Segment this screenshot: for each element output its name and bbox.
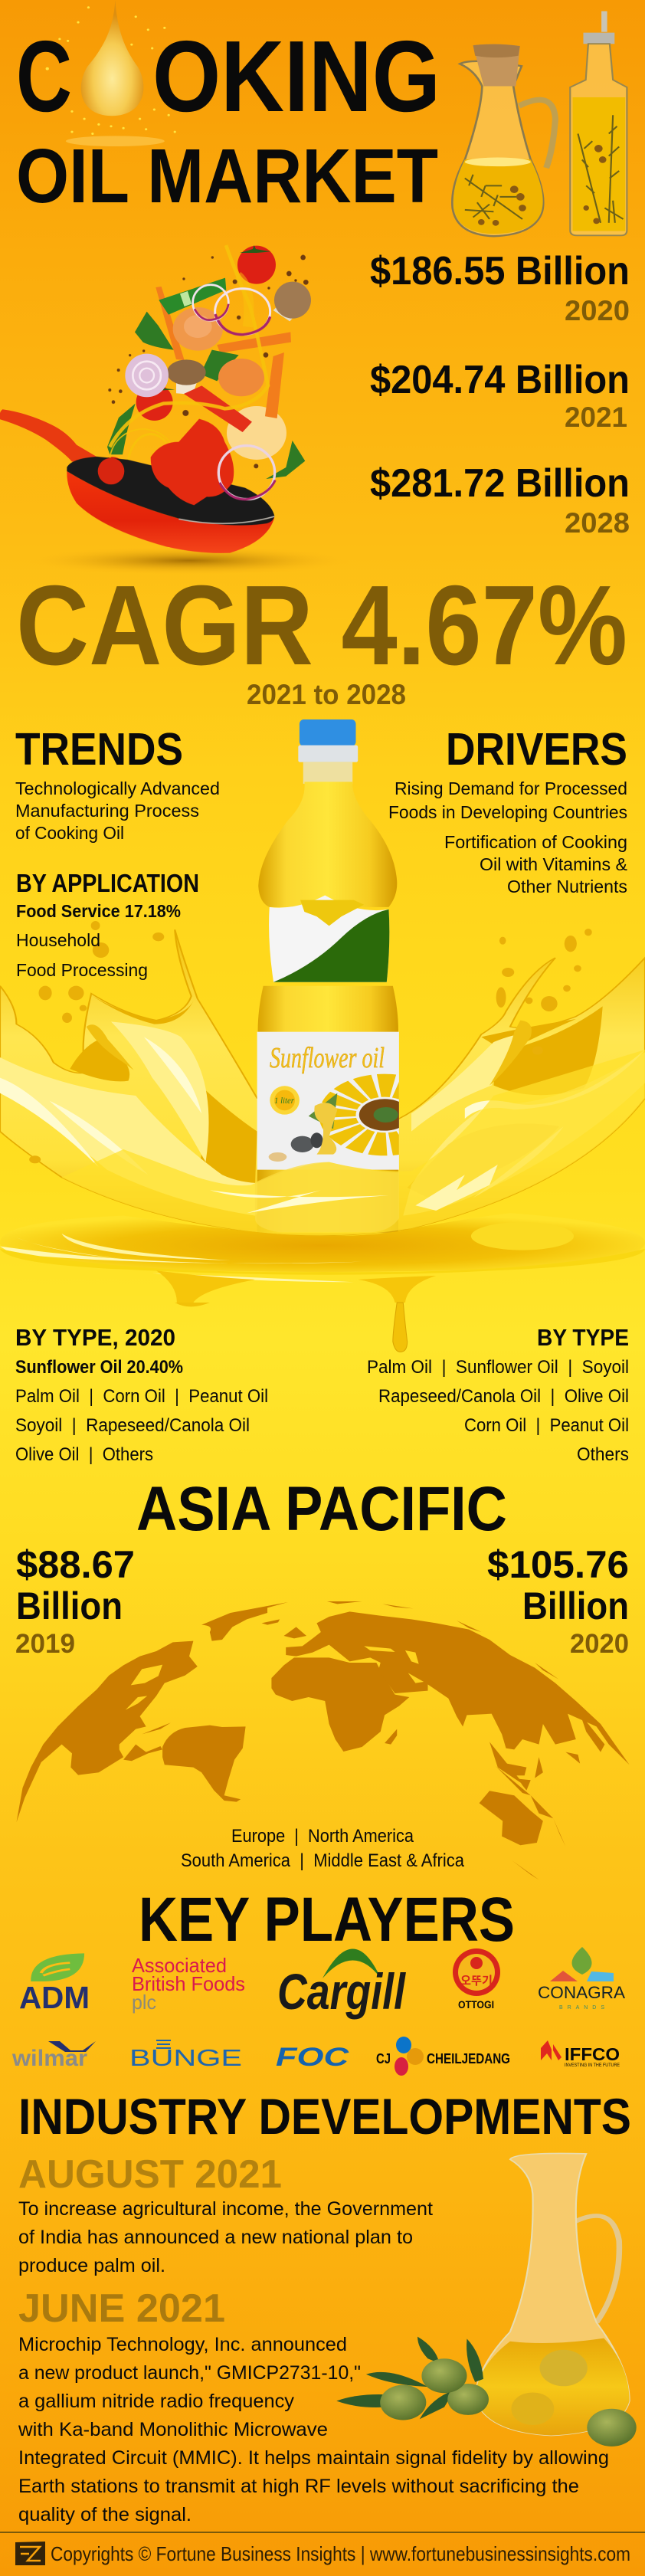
- driver text: Oil with Vitamins &: [480, 854, 627, 874]
- value 2019: [15, 1543, 135, 1659]
- market values 2020 2021 2028: 2020: [565, 295, 630, 326]
- bottle label text: 1 liter: [274, 1095, 294, 1106]
- footer: [15, 2542, 630, 2565]
- onion rings: [193, 285, 270, 335]
- other regions: Europe | North America: [231, 1826, 414, 1847]
- illustration: sunflower oil bottle: [257, 719, 398, 1233]
- heading: June 2021: JUNE 2021: [18, 2286, 225, 2331]
- logo: Conagra: [538, 1947, 625, 2011]
- icon: glass jug with herbs: [452, 44, 555, 236]
- logo: CJ CheilJedang: CJ: [376, 2051, 391, 2066]
- icon: Fortune Business Insights logo: [15, 2542, 45, 2565]
- panel: by application: [16, 869, 199, 980]
- value 2020: $105.76: [487, 1543, 629, 1586]
- driver text: [388, 778, 627, 896]
- type segments: Corn Oil | Peanut Oil: [464, 1415, 629, 1436]
- application list: [16, 901, 181, 980]
- heading: drivers: DRIVERS: [446, 724, 627, 775]
- panel: by type 2020: [15, 1324, 268, 1465]
- icon: golden oil drop: [46, 0, 176, 146]
- bottle label text: [270, 1042, 385, 1106]
- sunflower: [337, 1086, 432, 1144]
- bottle cap: [300, 719, 356, 746]
- logo: IFFCO: INVESTING IN THE FUTURE: [565, 2063, 620, 2068]
- carrot slices: [173, 307, 223, 351]
- CAGR period: 2021 to 2028: [247, 679, 406, 710]
- logo: ADM: [19, 1953, 90, 2015]
- logo: Conagra: CONAGRA: [538, 1983, 625, 2002]
- title: Cooking Oil Market: OKING: [152, 20, 440, 133]
- splash light bands: [0, 1021, 645, 1216]
- logo: Cargill: [277, 1949, 406, 2020]
- world map: [16, 1601, 630, 1880]
- application list: Household: [16, 930, 100, 950]
- pan body: [67, 471, 274, 553]
- mushrooms: [273, 306, 296, 321]
- tomatoes: [237, 246, 276, 284]
- title: Cooking Oil Market: OIL MARKET: [16, 133, 438, 219]
- illustration: oil splash back layer: [0, 921, 645, 1236]
- panel: trends: [15, 724, 220, 843]
- market values 2020 2021 2028: 2021: [565, 401, 627, 433]
- heading: Asia Pacific: ASIA PACIFIC: [136, 1474, 507, 1544]
- type segments: Rapeseed/Canola Oil | Olive Oil: [378, 1386, 629, 1407]
- heading: by application: BY APPLICATION: [16, 869, 199, 897]
- panel: drivers: [388, 724, 627, 896]
- body text: Integrated Circuit (MMIC). It helps maintain signal fidelity by allowing: [18, 2447, 609, 2469]
- panel: key player logos: [11, 1947, 625, 2076]
- logo: Associated British Foods: British Foods: [132, 1972, 245, 1995]
- seeds: [291, 1136, 314, 1152]
- splash shading: [70, 996, 603, 1198]
- red pepper strip: [184, 385, 252, 432]
- pan handle: [0, 409, 98, 462]
- logo: FOC: FOC: [276, 2043, 349, 2072]
- heading: August 2021: AUGUST 2021: [18, 2152, 282, 2197]
- value 2019: Billion: [16, 1585, 123, 1627]
- body text: Earth stations to transmit at high RF levels without sacrificing the: [18, 2476, 579, 2497]
- title: Cooking Oil Market: [16, 20, 440, 219]
- driver text: Other Nutrients: [507, 877, 627, 896]
- body text: quality of the signal.: [18, 2504, 192, 2525]
- logo: IFFCO: [541, 2040, 620, 2068]
- heading: key players: KEY PLAYERS: [139, 1885, 515, 1955]
- heading: trends: TRENDS: [15, 724, 183, 775]
- application list: Food Processing: [16, 960, 148, 980]
- logo: ADM: ADM: [19, 1980, 90, 2015]
- body text: with Ka-band Monolithic Microwave: [18, 2419, 328, 2440]
- splash highlights: [0, 1037, 645, 1198]
- bottle neck: [303, 762, 352, 784]
- olive leaves: [336, 2337, 483, 2419]
- main label: [257, 1032, 399, 1170]
- panel: August 2021: [18, 2152, 433, 2276]
- illustration: pan with flying vegetables: [0, 245, 352, 575]
- heading: by type 2020: BY TYPE, 2020: [15, 1324, 175, 1351]
- carrot strips: [156, 287, 291, 418]
- waist label: [269, 896, 389, 982]
- type list: Palm Oil | Corn Oil | Peanut Oil: [15, 1386, 268, 1407]
- driver text: Foods in Developing Countries: [388, 802, 627, 822]
- market values 2020 2021 2028: [370, 249, 630, 539]
- value 2020: Billion: [522, 1585, 629, 1627]
- red bell pepper: [151, 419, 234, 505]
- market values 2020 2021 2028: $204.74 Billion: [370, 358, 630, 402]
- front onion ring: [218, 446, 275, 500]
- body text: To increase agricultural income, the Government: [18, 2198, 433, 2220]
- other regions: South America | Middle East & Africa: [181, 1850, 465, 1871]
- type list: [15, 1357, 268, 1465]
- other regions: [181, 1826, 465, 1871]
- drip into type section: [175, 1303, 408, 1352]
- bottle shoulder: [258, 782, 397, 907]
- driver text: Fortification of Cooking: [444, 832, 627, 852]
- drips: [156, 1270, 255, 1303]
- panel: by type: [367, 1324, 629, 1465]
- logo: Conagra: BRANDS: [559, 2005, 604, 2011]
- illustration: oil wave and pool: [0, 1050, 645, 1303]
- body text: of India has announced a new national plan to: [18, 2227, 413, 2248]
- panel: June 2021: [18, 2286, 609, 2525]
- type list: Soyoil | Rapeseed/Canola Oil: [15, 1415, 250, 1436]
- market values 2020 2021 2028: 2028: [565, 507, 630, 539]
- market values 2020 2021 2028: $281.72 Billion: [370, 461, 630, 506]
- logo: Wilmar: wilmar: [11, 2046, 87, 2071]
- panel: Asia Pacific: [15, 1474, 629, 1659]
- body text: [18, 2334, 609, 2525]
- market values 2020 2021 2028: $186.55 Billion: [370, 249, 630, 293]
- body text: produce palm oil.: [18, 2255, 165, 2276]
- potato: [227, 406, 286, 460]
- logo: Associated British Foods: [132, 1954, 245, 2014]
- value 2019: $88.67: [16, 1543, 135, 1586]
- type list: Sunflower Oil 20.40%: [15, 1357, 183, 1378]
- body text: [18, 2198, 433, 2276]
- body text: a gallium nitride radio frequency: [18, 2391, 295, 2412]
- icon: oil bottle with dropper: [570, 11, 627, 235]
- title: Cooking Oil Market: C: [16, 20, 72, 133]
- value 2020: 2020: [570, 1629, 629, 1659]
- drops around splash: [29, 921, 592, 1163]
- badge: [270, 1086, 300, 1115]
- illustration: olive oil jug with olives: [336, 2153, 637, 2447]
- body text: a new product launch," GMICP2731-10,": [18, 2362, 361, 2384]
- value 2019: 2019: [15, 1629, 75, 1659]
- trend text: Technologically Advanced: [15, 778, 220, 798]
- type list: Olive Oil | Others: [15, 1444, 153, 1465]
- logo: Ottogi: OTTOGI: [458, 1998, 494, 2011]
- onion half: [125, 354, 169, 397]
- olives: [447, 2384, 489, 2415]
- bottle label text: Sunflower oil: [270, 1042, 385, 1074]
- driver text: Rising Demand for Processed: [395, 778, 627, 798]
- green pepper strip: [159, 278, 226, 315]
- trend text: Manufacturing Process: [15, 801, 199, 821]
- body text: Microchip Technology, Inc. announced: [18, 2334, 347, 2355]
- logo: Bunge: [129, 2040, 242, 2071]
- type segments: [367, 1357, 629, 1465]
- heading: by type: BY TYPE: [537, 1324, 629, 1351]
- logo: CJ CheilJedang: [376, 2037, 510, 2076]
- tomato in pan: [98, 458, 124, 484]
- logo: Bunge: BUNGE: [129, 2044, 242, 2071]
- application list: Food Service 17.18%: [16, 901, 181, 921]
- trend text: [15, 778, 220, 843]
- logo: Ottogi: 오뚜기: [460, 1975, 493, 1988]
- lobe tips: [87, 1021, 532, 1086]
- logo: CJ CheilJedang: CHEILJEDANG: [427, 2051, 510, 2066]
- type segments: Palm Oil | Sunflower Oil | Soyoil: [367, 1357, 629, 1378]
- logo: IFFCO: IFFCO: [565, 2044, 620, 2064]
- oil streams: [110, 245, 268, 500]
- pool: [0, 1213, 645, 1272]
- trend text: of Cooking Oil: [15, 823, 124, 843]
- logo: Ottogi: [453, 1948, 500, 2011]
- type segments: Others: [577, 1444, 629, 1465]
- value 2020: [487, 1543, 629, 1659]
- logo: Associated British Foods: plc: [132, 1991, 156, 2014]
- logo: Associated British Foods: Associated: [132, 1954, 227, 1977]
- lower bottle body: [257, 986, 398, 1233]
- logo: Cargill: Cargill: [277, 1963, 406, 2020]
- parsley leaves: [107, 312, 305, 479]
- spice dots: [108, 255, 309, 468]
